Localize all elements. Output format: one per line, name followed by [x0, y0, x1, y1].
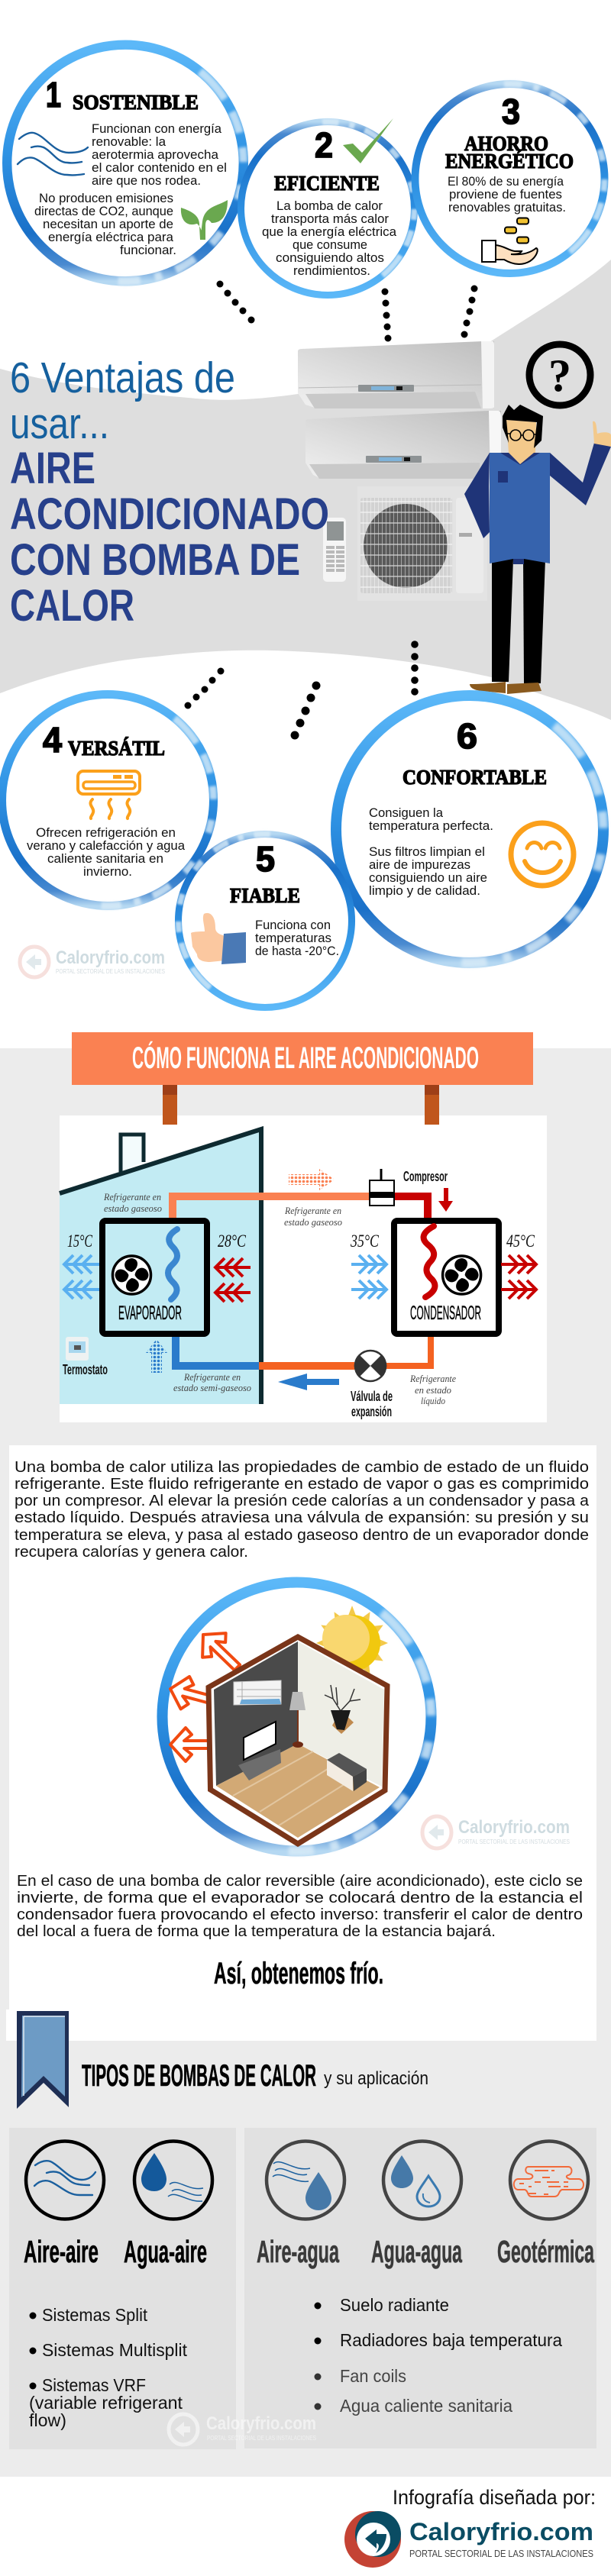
dotted connector: circle 1 [217, 281, 255, 324]
text: versatil: verano y calefacción y agua [27, 839, 186, 853]
text: explanation paragraph 2: En el caso de una bomba de calor reversible (aire acondicionado), este ciclo se [17, 1872, 583, 1890]
text: ahorro [448, 175, 566, 215]
title: CALOR [10, 581, 134, 631]
room [209, 1637, 387, 1844]
text: versatil: invierno. [83, 865, 132, 879]
list: aire systems: flow) [29, 2410, 66, 2430]
text: explanation paragraph 2: invierte, de forma que el evaporador se colocará dentro de la estancia el [17, 1889, 583, 1906]
glasses [506, 430, 537, 441]
heading: tipos de bombas de calor: y su aplicación [324, 2068, 428, 2089]
text: versatil: Ofrecen refrigeración en [36, 826, 176, 840]
refrigerant labels: estado gaseoso [284, 1216, 342, 1228]
text: eficiencia: transporta más calor [271, 212, 390, 226]
callout: asi obtenemos frio: Así, obtenemos frío. [214, 1957, 383, 1990]
house [60, 1129, 261, 1404]
component labels: Compresor [403, 1169, 448, 1184]
icon: question mark: ? [548, 350, 571, 401]
legs [492, 559, 545, 683]
text: versatil: caliente sanitaria en [47, 852, 163, 866]
panel: advantage 6 circle [336, 696, 603, 963]
text: ahorro: proviene de fuentes [449, 188, 562, 202]
text: explanation paragraph 2 [17, 1872, 583, 1940]
illustration: room in circle [162, 1582, 431, 1851]
heading: eficiente: EFICIENTE [274, 172, 380, 195]
number 6: 6 [457, 716, 477, 756]
text: energia renovable: renovable: la [92, 135, 166, 149]
heading: confortable: CONFORTABLE [402, 766, 547, 789]
component labels [63, 1169, 448, 1419]
text: confort [369, 806, 493, 898]
compressor icon [370, 1169, 394, 1206]
heading: ahorro energetico [445, 132, 574, 173]
watermark: middle: PORTAL SECTORIAL DE LAS INSTALACIONES [458, 1838, 570, 1845]
text: explanation paragraph 1: Una bomba de calor utiliza las propiedades de cambio de estado de un fluido [15, 1458, 589, 1476]
dotted orange arrow [289, 1169, 335, 1190]
icon: thumbs up [191, 913, 246, 964]
watermark: middle [422, 1816, 570, 1848]
title: CON BOMBA DE [10, 535, 300, 585]
temperature labels [67, 1232, 535, 1251]
watermark: bottom: PORTAL SECTORIAL DE LAS INSTALACIONES [207, 2435, 316, 2442]
icon: thermostat [66, 1337, 89, 1361]
blue flow arrow [278, 1374, 339, 1390]
list: agua applications: Fan coils [340, 2366, 406, 2386]
temperature labels: 45°C [506, 1232, 535, 1251]
text: energia renovable: aire que nos rodea. [92, 174, 201, 188]
text: explanation paragraph 1: por un compresor. Al elevar la presión cede calorías a un condensador y pasa a [15, 1492, 590, 1509]
refrigerant labels: Refrigerante en [103, 1191, 161, 1202]
AC remote control [323, 518, 346, 582]
label: agua-agua: Agua-agua [371, 2234, 463, 2269]
list: agua applications: Radiadores baja temperatura [340, 2330, 562, 2350]
list: aire systems [29, 2305, 188, 2430]
text: ahorro: renovables gratuitas. [448, 201, 566, 215]
raised hand [593, 421, 611, 447]
deer trophy [325, 1685, 360, 1734]
icon: AC with heat [78, 771, 140, 818]
refrigerant labels: Refrigerante en [183, 1371, 241, 1383]
icon: smiley [511, 823, 574, 886]
panel: advantage 4 circle [2, 695, 214, 905]
text: emisiones: necesitan un aporte de [43, 218, 173, 231]
heading: fiable: FIABLE [230, 884, 300, 907]
title: ACONDICIONADO [10, 489, 329, 539]
number 2: 2 [315, 125, 333, 165]
panel: agua types [244, 2128, 596, 2448]
text: explanation paragraph 1: recupera calorías y genera calor. [15, 1543, 248, 1561]
list: agua applications: Suelo radiante [340, 2295, 449, 2315]
number 5: 5 [256, 839, 275, 879]
list: agua applications: Agua caliente sanitaria [340, 2396, 512, 2416]
dotted connector: circle 2 [382, 289, 391, 342]
text: explanation paragraph 1: temperatura se eleva, y pasa al estado gaseoso dentro de un evaporador donde [15, 1526, 589, 1544]
title [10, 353, 329, 631]
text: eficiencia [262, 199, 397, 278]
list: agua applications [315, 2295, 562, 2416]
heading: sostenible: SOSTENIBLE [73, 91, 199, 114]
gray swoosh background [0, 260, 611, 720]
icon: sun [316, 1606, 388, 1674]
watermark: top [20, 947, 165, 977]
icon: question mark [529, 344, 590, 405]
dotted blue arrow [146, 1339, 167, 1373]
evaporador box [102, 1221, 207, 1334]
text: eficiencia: rendimientos. [293, 264, 370, 278]
refrigerant labels: estado gaseoso [104, 1202, 162, 1214]
label: aire-aire: Aire-aire [24, 2234, 99, 2269]
temperature labels: 35°C [350, 1232, 380, 1251]
text: emisiones: energía eléctrica para [48, 231, 174, 244]
text: explanation paragraph 2: condensador fuera provocando el efecto inverso: transferir el calor de dentro [17, 1906, 583, 1923]
number 3: 3 [502, 92, 520, 131]
watermark: top: PORTAL SECTORIAL DE LAS INSTALACIONES [56, 968, 165, 975]
refrigerant labels: Refrigerante [409, 1373, 456, 1384]
man illustration [464, 405, 611, 694]
label: aire-agua: Aire-agua [257, 2234, 340, 2269]
text: emisiones: funcionar. [120, 244, 176, 257]
text: versatil [27, 826, 186, 879]
indoor AC unit top [298, 341, 494, 408]
list: aire systems: Sistemas Split [42, 2305, 148, 2325]
text: eficiencia: que consume [293, 238, 367, 252]
text: explanation paragraph 1 [15, 1458, 590, 1561]
panel: advantage 3 circle [415, 84, 605, 273]
banner: como funciona [72, 1032, 533, 1085]
refrigerant pipes [173, 1196, 431, 1366]
dotted connector: circle 4 [185, 667, 225, 709]
watermark: middle: Caloryfrio.com [458, 1817, 570, 1838]
text: eficiencia: La bomba de calor [276, 199, 383, 213]
dotted connector: circle 3 [461, 286, 478, 337]
watermark: bottom [169, 2413, 316, 2445]
temperature labels: 15°C [67, 1232, 92, 1251]
fan: condensador [443, 1256, 481, 1294]
text: fiable: temperaturas [255, 931, 331, 945]
watermark: top: Caloryfrio.com [56, 947, 165, 968]
component labels: expansión [351, 1404, 392, 1419]
text: fiable: de hasta -20°C. [255, 944, 339, 958]
text: confort: Sus filtros limpian el [369, 845, 485, 859]
coil: red [424, 1226, 435, 1297]
text: explanation paragraph 1: estado líquido. Después atraviesa una válvula de expansión: su presión y su [15, 1509, 589, 1526]
icon: geotermica [510, 2141, 588, 2219]
wall AC [234, 1680, 281, 1705]
icon: aire-aire [26, 2141, 104, 2219]
text: confort: aire de impurezas [369, 858, 470, 872]
panel: explanation [6, 1445, 596, 2041]
label: agua-aire: Agua-aire [124, 2234, 207, 2269]
number 4: 4 [43, 720, 62, 760]
list: aire systems: Sistemas Multisplit [42, 2340, 188, 2360]
refrigerant labels: líquido [421, 1395, 445, 1406]
text: energia renovable: aerotermia aprovecha [92, 148, 219, 162]
list: aire systems: Sistemas VRF [42, 2375, 146, 2395]
panel: advantage 5 circle [179, 834, 351, 1008]
panel: aire types [9, 2128, 236, 2449]
text: fiable: Funciona con [255, 918, 331, 932]
text: explanation paragraph 2: del local a fuera de forma que la temperatura de la estancia bajará. [17, 1922, 496, 1940]
valve icon [354, 1350, 386, 1382]
heading: ahorro energetico: ENERGÉTICO [445, 150, 574, 173]
logo wordmark: Caloryfrio.com [409, 2518, 593, 2545]
shoes [470, 682, 541, 694]
refrigerant labels [103, 1191, 456, 1406]
temperature labels: 28°C [218, 1232, 247, 1251]
diagram panel [60, 1115, 547, 1422]
list: aire systems: (variable refrigerant [29, 2393, 183, 2413]
title: 6 Ventajas de [10, 353, 235, 402]
text: emisiones: No producen emisiones [39, 192, 173, 205]
indoor AC unit bottom [306, 411, 501, 479]
text: energia renovable: Funcionan con energía [92, 122, 222, 136]
icon: hand with coins [482, 218, 538, 264]
icon: check mark [343, 118, 393, 163]
text: eficiencia: que la energía eléctrica [262, 225, 397, 239]
condensador box [394, 1221, 499, 1334]
head [506, 420, 536, 464]
text: energia renovable: el calor contenido en el [92, 161, 227, 175]
footer credit: Infografía diseñada por: [393, 2486, 596, 2509]
section background: como funciona [0, 1048, 611, 2477]
dotted connector: circle 6 [411, 641, 419, 696]
panel: advantage 2 circle [241, 118, 414, 295]
title: usar... [10, 399, 109, 448]
icon: aire-agua [267, 2141, 344, 2219]
text: fiable [255, 918, 339, 958]
heading: ahorro energetico: AHORRO [464, 132, 548, 155]
shirt [490, 453, 550, 563]
text: emisiones: directas de CO2, aunque [34, 205, 173, 218]
coil: blue [168, 1229, 177, 1299]
text: explanation paragraph 1: refrigerante. Este fluido refrigerante en estado de vapor o gas es comprimido [15, 1475, 589, 1493]
component labels: Válvula de [351, 1389, 393, 1404]
icon: ribbon [17, 2011, 69, 2109]
refrigerant labels: en estado [415, 1384, 451, 1396]
text: energia renovable [92, 122, 227, 188]
condensador box: CONDENSADOR [410, 1303, 481, 1324]
refrigerant labels: Refrigerante en [284, 1205, 341, 1216]
component labels: Termostato [63, 1362, 108, 1377]
text: confort: temperatura perfecta. [369, 819, 493, 833]
dotted connector: circle 5 [290, 681, 321, 739]
outdoor AC unit [357, 486, 487, 601]
text: confort: consiguiendo un aire [369, 871, 487, 885]
icon: agua-agua [383, 2141, 461, 2219]
icon: air waves [18, 133, 88, 175]
text: ahorro: El 80% de su energía [448, 175, 564, 189]
floor lamp [289, 1692, 306, 1748]
arrows: heat out [166, 1622, 249, 1761]
chest [327, 1753, 367, 1791]
panel: advantage 1 circle [7, 45, 244, 281]
refrigerant labels: estado semi-gaseoso [173, 1382, 251, 1393]
watermark: bottom: Caloryfrio.com [206, 2413, 316, 2434]
logo: caloryfrio [344, 2511, 593, 2568]
number 1: 1 [46, 75, 61, 115]
text: confort: Consiguen la [369, 806, 444, 820]
hair [503, 405, 543, 448]
icon: plant [181, 200, 228, 240]
icon: agua-aire [134, 2141, 212, 2219]
banner legs [163, 1085, 439, 1125]
air flow arrows [64, 1255, 536, 1302]
raised arm [550, 443, 611, 505]
fan: evaporador [113, 1256, 151, 1294]
logo mark [344, 2511, 401, 2568]
left arm [464, 453, 490, 538]
text: eficiencia: consiguiendo altos [276, 251, 384, 265]
heading: versatil: VERSÁTIL [68, 737, 165, 760]
title: AIRE [10, 444, 95, 493]
text: confort: limpio y de calidad. [369, 884, 480, 898]
evaporador box: EVAPORADOR [118, 1303, 182, 1324]
red arrow [438, 1188, 453, 1212]
heading: tipos de bombas de calor: TIPOS DE BOMBAS DE CALOR [82, 2059, 316, 2093]
TV [238, 1722, 281, 1780]
text: emisiones [34, 192, 176, 257]
